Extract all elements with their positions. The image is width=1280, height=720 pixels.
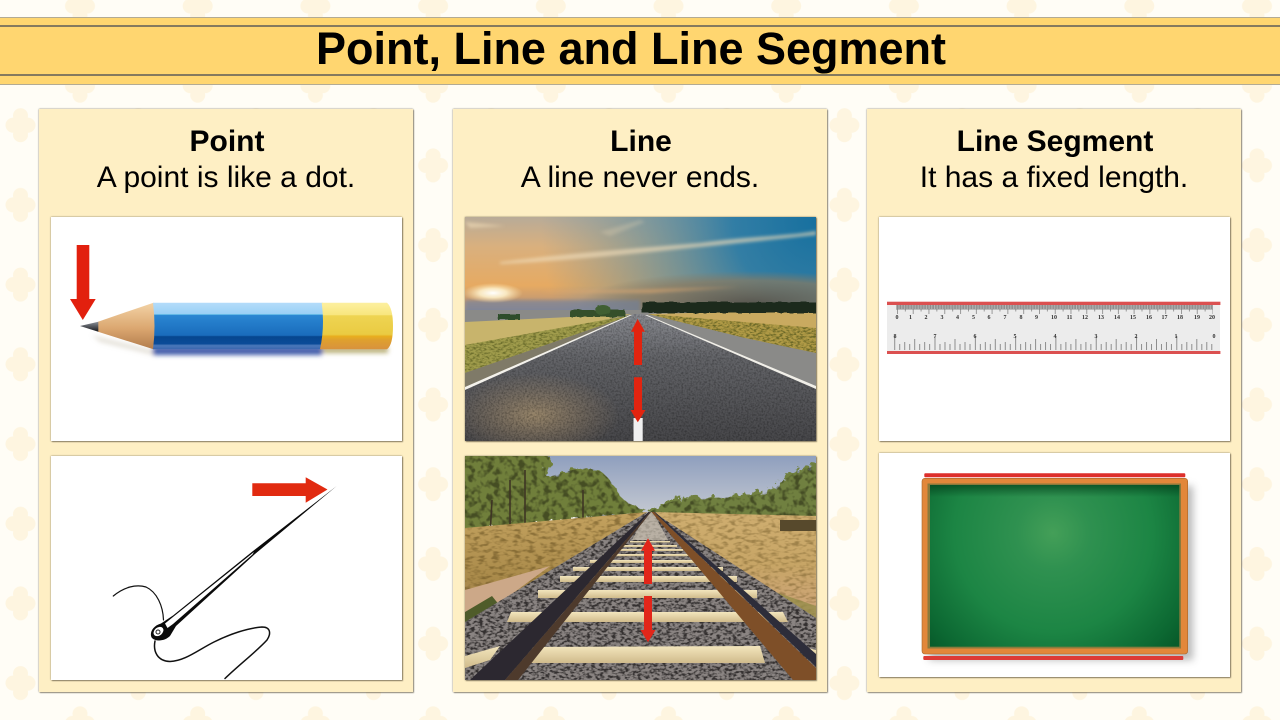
ruler: 0 xyxy=(896,315,898,321)
ruler: 3 xyxy=(940,315,944,321)
ruler: 11 xyxy=(1067,315,1072,321)
ruler xyxy=(887,302,1220,354)
pencil shadow xyxy=(92,335,388,355)
ruler: 20 xyxy=(1209,315,1215,321)
ruler: 5 xyxy=(1014,334,1016,340)
sky xyxy=(465,456,816,516)
fields and trees xyxy=(465,302,816,395)
image: ruler xyxy=(879,217,1230,441)
ruler: 6 xyxy=(988,315,990,321)
ruler: 8 xyxy=(894,334,896,340)
red bottom edge xyxy=(923,656,1183,660)
ground xyxy=(465,512,816,625)
description: point: A point is like a dot. xyxy=(97,161,355,194)
heading: line: Line xyxy=(610,125,672,158)
chalkboard xyxy=(922,478,1188,654)
description: line: A line never ends. xyxy=(521,161,759,194)
red arrow pointing at needle tip xyxy=(252,477,328,503)
ruler: 4 xyxy=(956,315,959,321)
red double arrow on track xyxy=(640,538,656,642)
ruler: 17 xyxy=(1162,315,1168,321)
panel: line xyxy=(453,109,827,692)
image: chalkboard xyxy=(879,453,1230,677)
red arrow pointing at pencil tip xyxy=(70,245,96,320)
image: needle xyxy=(51,456,402,680)
pencil xyxy=(80,303,393,349)
thread xyxy=(113,586,270,678)
ruler: 19 xyxy=(1194,315,1200,321)
needle xyxy=(151,486,337,640)
image: road xyxy=(465,217,816,441)
ruler: 5 xyxy=(972,315,975,321)
title banner xyxy=(0,17,1280,85)
ruler: 1 xyxy=(1174,334,1178,340)
ruler: 4 xyxy=(1054,334,1056,340)
ruler: 9 xyxy=(1035,315,1038,321)
heading: line segment: Line Segment xyxy=(957,125,1153,158)
ruler: 8 xyxy=(1020,315,1022,321)
rails xyxy=(470,512,816,680)
ruler: 6 xyxy=(974,334,976,340)
ruler: 7 xyxy=(934,334,936,340)
ruler: 7 xyxy=(1004,315,1006,321)
heading: point: Point xyxy=(190,125,264,158)
board shadow xyxy=(929,486,1193,660)
image: railway track xyxy=(465,456,816,680)
title: Point, Line and Line Segment xyxy=(316,23,946,74)
ruler: 0 xyxy=(1212,334,1216,340)
ruler: 1 xyxy=(909,315,912,321)
sleepers xyxy=(465,541,816,668)
ruler: 3 xyxy=(1094,334,1098,340)
ruler: 15 xyxy=(1130,315,1136,321)
road xyxy=(465,314,816,441)
ruler: 16 xyxy=(1146,315,1152,321)
panel: line segment xyxy=(867,109,1241,692)
panel: point xyxy=(39,109,413,692)
description: line segment: It has a fixed length. xyxy=(920,161,1188,194)
ruler: 14 xyxy=(1114,315,1120,321)
red double arrow on road xyxy=(630,319,646,422)
sky xyxy=(463,217,920,335)
ruler: 18 xyxy=(1177,315,1183,321)
ruler: 2 xyxy=(1134,334,1138,340)
ruler: 10 xyxy=(1051,315,1057,321)
ruler: 2 xyxy=(924,315,928,321)
trees xyxy=(460,452,820,536)
ruler: 12 xyxy=(1082,315,1088,321)
image: pencil xyxy=(51,217,402,441)
ruler: 13 xyxy=(1098,315,1104,321)
ballast xyxy=(465,512,816,680)
red top edge xyxy=(924,473,1185,477)
